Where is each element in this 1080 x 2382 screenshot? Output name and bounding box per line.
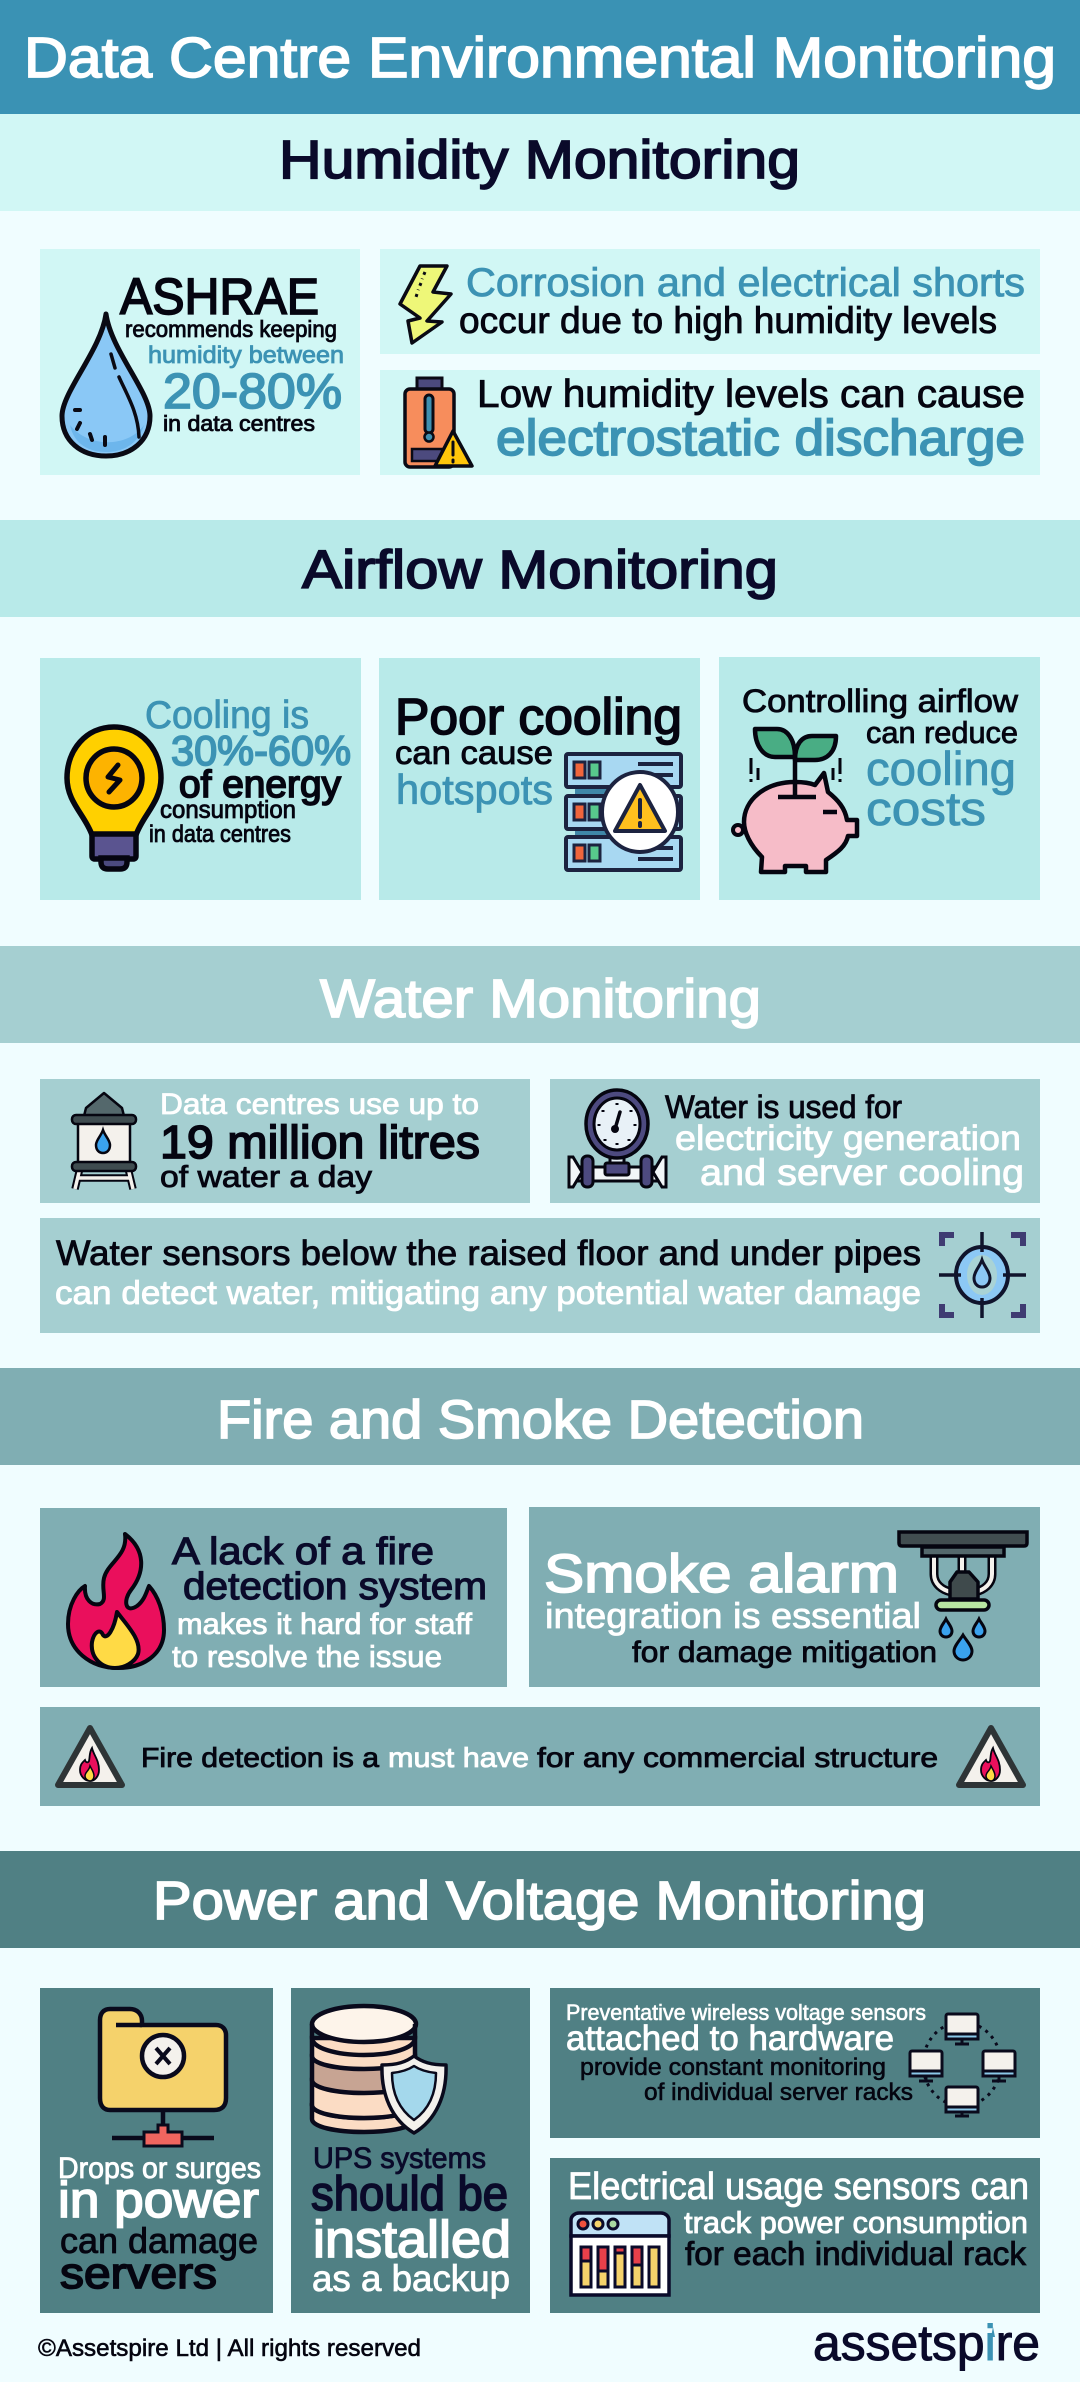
text: voltage sensors: [566, 2000, 926, 2106]
heading: Power and Voltage Monitoring: Power and Voltage Monitoring: [153, 1871, 926, 1931]
text: ASHRAE recommendation: ASHRAE: [120, 268, 319, 325]
text: water sensors: [55, 1234, 921, 1311]
text: voltage sensors: Preventative wireless voltage sensors: [566, 2000, 926, 2025]
text: cooling percentage: [145, 694, 351, 848]
text: controlling airflow: can reduce: [866, 715, 1018, 750]
text: cooling percentage: 30%-60%: [171, 727, 351, 774]
icon: network of monitors: [910, 2014, 1015, 2116]
text: drops or surges: [58, 2152, 261, 2298]
text: water sensors: can detect water, mitigating any potential water damage: [55, 1274, 921, 1311]
text: controlling airflow: cooling: [866, 742, 1016, 795]
text: lack of fire detection: detection system: [183, 1566, 487, 1608]
text: water usage: of water a day: [160, 1159, 373, 1194]
text: cooling percentage: Cooling is: [145, 694, 309, 737]
heading: Water Monitoring: Water Monitoring: [320, 969, 761, 1029]
text: lack of fire detection: makes it hard for staff: [177, 1608, 473, 1641]
icon: light bulb: [67, 727, 161, 869]
icon: lightning bolt: [400, 266, 451, 343]
text: ASHRAE recommendation: recommends keeping: [125, 316, 337, 342]
text: UPS systems: should be: [311, 2168, 508, 2221]
heading: Fire and Smoke Detection: Fire and Smoke Detection: [217, 1390, 864, 1450]
text: corrosion statement: Corrosion and electrical shorts: [466, 261, 1025, 305]
heading: Fire and Smoke Detection: [0, 1368, 1080, 1465]
text: water purposes: Water is used for: [665, 1089, 902, 1125]
text: voltage sensors: provide constant monitoring: [580, 2054, 886, 2081]
text: smoke alarm: integration is essential: [545, 1595, 921, 1636]
text: must have statement: Fire detection is a: [141, 1742, 379, 1773]
text: poor cooling: hotspots: [396, 766, 553, 813]
panel: corrosion and electrical shorts: [380, 249, 1040, 354]
text: UPS systems: installed: [313, 2211, 511, 2269]
icon: flame: [68, 1534, 164, 1668]
text: usage sensors: track power consumption: [684, 2205, 1028, 2240]
icon: power dashboard: [571, 2213, 669, 2295]
icon: folder with network: [100, 2009, 226, 2146]
panel: lack of fire detection: [40, 1508, 507, 1687]
text: lack of fire detection: to resolve the issue: [172, 1639, 442, 1674]
text: poor cooling: can cause: [395, 734, 553, 771]
text: ASHRAE recommendation: 20-80%: [163, 365, 342, 419]
text: usage sensors: Electrical usage sensors can: [568, 2166, 1029, 2208]
text: drops or surges: servers: [60, 2249, 217, 2298]
title banner: Data Centre Environmental Monitoring: [24, 26, 1056, 90]
panel: drops or surges in power: [40, 1988, 273, 2313]
icon: ceiling sprinkler: [899, 1532, 1027, 1660]
heading: Humidity Monitoring: [0, 114, 1080, 211]
text: water purposes: and server cooling: [700, 1152, 1024, 1193]
text: water purposes: [665, 1089, 1024, 1193]
heading: Airflow Monitoring: Airflow Monitoring: [302, 540, 778, 600]
text: voltage sensors: attached to hardware: [566, 2019, 894, 2058]
panel: water used for: [550, 1079, 1040, 1203]
text: drops or surges: Drops or surges: [58, 2152, 261, 2185]
text: controlling airflow: [742, 683, 1019, 835]
text: voltage sensors: of individual server racks: [644, 2079, 913, 2106]
text: cooling percentage: in data centres: [149, 821, 291, 848]
heading: Humidity Monitoring: Humidity Monitoring: [279, 130, 800, 190]
panel: poor cooling: [379, 658, 700, 900]
text: drops or surges: can damage: [60, 2220, 258, 2261]
icon: fire warning triangle right: [959, 1728, 1023, 1785]
text: corrosion statement: [459, 261, 1025, 341]
text: UPS systems: as a backup: [312, 2258, 510, 2299]
icon: database with shield: [312, 2006, 446, 2133]
title banner: [0, 0, 1080, 114]
text: controlling airflow: Controlling airflow: [742, 683, 1019, 719]
text: smoke alarm: Smoke alarm: [544, 1544, 899, 1604]
icon: water drop: [62, 314, 150, 456]
text: lack of fire detection: [172, 1531, 487, 1674]
panel: fire detection is a must have: [40, 1707, 1040, 1806]
text: ASHRAE recommendation: [120, 268, 344, 436]
panel: cooling share of energy: [40, 658, 361, 900]
text: water sensors: Water sensors below the raised floor and under pipes: [56, 1234, 921, 1273]
heading: Airflow Monitoring: [0, 520, 1080, 617]
text: controlling airflow: costs: [866, 782, 986, 835]
text: smoke alarm: for damage mitigation: [632, 1636, 937, 1669]
panel: electrical usage sensors: [550, 2158, 1040, 2313]
text: usage sensors: [568, 2166, 1029, 2272]
footer copyright: ©Assetspire Ltd | All rights reserved: [38, 2335, 421, 2362]
text: smoke alarm: [544, 1544, 937, 1669]
text: usage sensors: for each individual rack: [685, 2235, 1026, 2272]
panel: electrostatic discharge: [380, 370, 1040, 475]
panel: smoke alarm integration: [529, 1507, 1040, 1687]
panel: ASHRAE humidity recommendation: [40, 249, 360, 475]
text: corrosion statement: occur due to high humidity levels: [459, 300, 997, 341]
text: lack of fire detection: A lack of a fire: [172, 1531, 434, 1573]
text: electrostatic discharge statement: electrostatic discharge: [496, 410, 1025, 466]
icon: fire warning triangle left: [58, 1728, 122, 1785]
text: water usage: 19 million litres: [160, 1116, 480, 1168]
text: must have statement: [141, 1742, 938, 1773]
icon: water tower: [72, 1093, 136, 1189]
text: poor cooling: Poor cooling: [395, 688, 682, 745]
text: must have statement: must have: [388, 1742, 529, 1773]
text: ASHRAE recommendation: in data centres: [163, 411, 315, 436]
heading: Water Monitoring: [0, 946, 1080, 1043]
logo: assetspire: assetspire: [813, 2315, 1040, 2371]
text: poor cooling: [395, 688, 682, 813]
text: water usage: [160, 1088, 480, 1194]
icon: water sensor target: [939, 1232, 1026, 1318]
icon: piggy bank with sprout: [733, 729, 857, 872]
panel: controlling airflow: [719, 657, 1040, 900]
text: water purposes: electricity generation: [675, 1119, 1021, 1158]
icon: server rack with warning: [566, 754, 681, 870]
icon: battery with warning: [405, 378, 472, 467]
text: UPS systems: UPS systems: [313, 2142, 486, 2175]
text: cooling percentage: of energy: [179, 764, 341, 806]
panel: water sensors: [40, 1218, 1040, 1333]
icon: pressure gauge: [569, 1090, 666, 1187]
text: electrostatic discharge statement: Low humidity levels can cause: [477, 373, 1025, 416]
text: drops or surges: in power: [58, 2172, 259, 2228]
text: must have statement: for any commercial structure: [537, 1742, 938, 1773]
text: water usage: Data centres use up to: [160, 1088, 479, 1121]
text: cooling percentage: consumption: [160, 796, 296, 824]
panel: UPS systems: [291, 1988, 530, 2313]
text: electrostatic discharge statement: [477, 373, 1025, 466]
panel: wireless voltage sensors: [550, 1988, 1040, 2138]
panel: water use per day: [40, 1079, 530, 1203]
heading: Power and Voltage Monitoring: [0, 1851, 1080, 1948]
text: UPS systems: [311, 2142, 511, 2299]
text: ASHRAE recommendation: humidity between: [148, 342, 344, 369]
